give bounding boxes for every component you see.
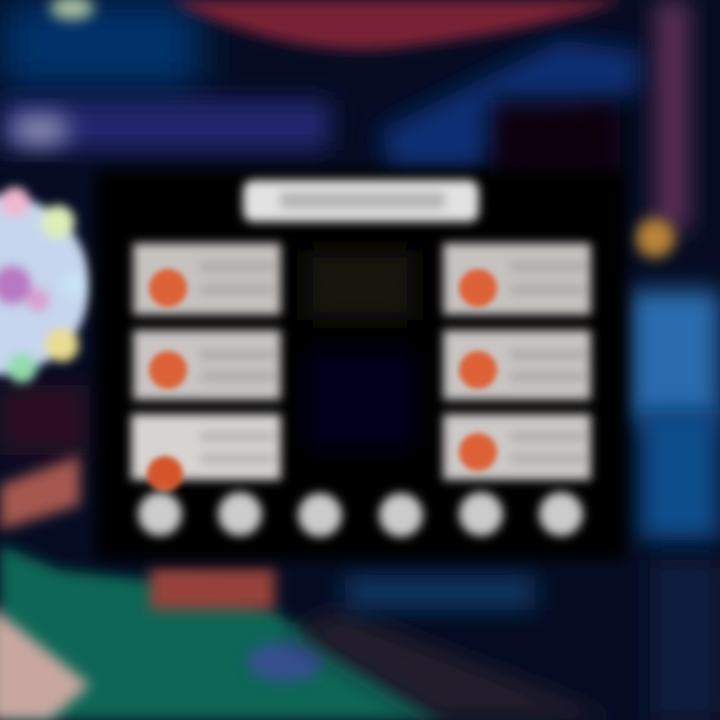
- decoration: ceiling light: [50, 0, 94, 20]
- card: right 3: [443, 414, 591, 480]
- icon: orange dot right 1: [459, 269, 497, 307]
- center image panel: [305, 250, 415, 450]
- decoration: red ceiling arc: [170, 0, 625, 50]
- bottom icon row: [138, 492, 583, 537]
- title pill: [243, 180, 479, 222]
- icon: orange dot right 2: [459, 351, 497, 389]
- blue sign under panel: [345, 575, 535, 610]
- left pink table edge: [0, 455, 80, 530]
- red sign under panel: [150, 568, 275, 610]
- panel: main black board: [96, 170, 626, 560]
- decoration: rainbow roulette wheel: [0, 187, 90, 383]
- icon: orange dot right 3: [459, 433, 497, 471]
- decoration: wall lamp: [635, 218, 675, 258]
- icon: orange dot left 2: [149, 351, 187, 389]
- card: left 3: [131, 414, 281, 480]
- icon: orange dot left 1: [149, 269, 187, 307]
- card: left 1: [133, 243, 281, 315]
- card: left 2: [133, 330, 281, 400]
- card: right 2: [443, 330, 591, 400]
- icon: orange dot left 3: [147, 456, 183, 492]
- green card table: [0, 545, 620, 720]
- card: right 1: [443, 243, 591, 315]
